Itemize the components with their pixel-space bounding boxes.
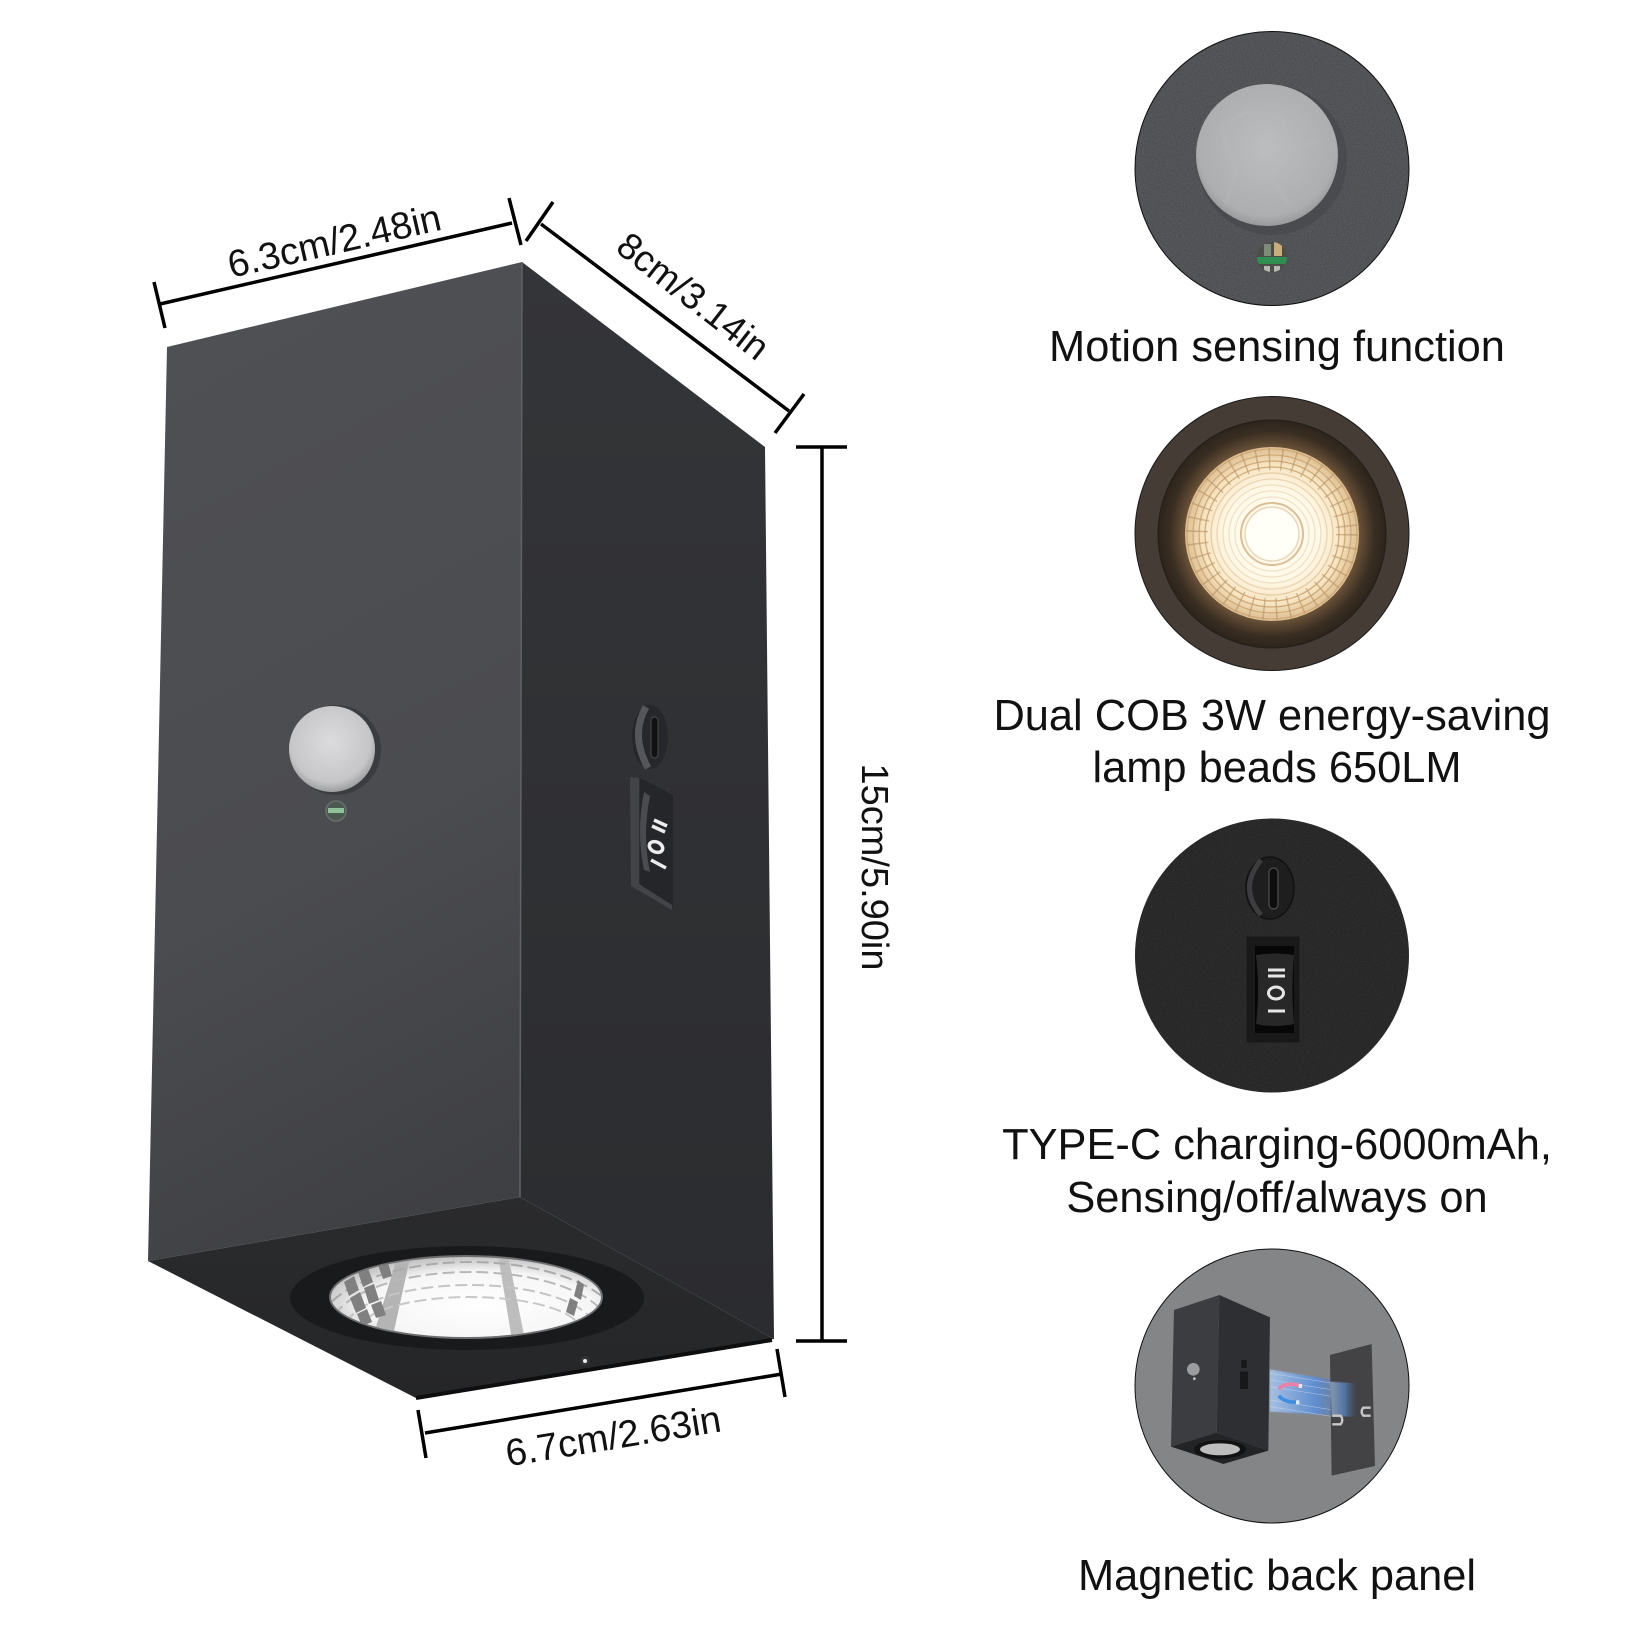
- panel: Type-C charging feature: [1002, 818, 1552, 1222]
- icon: USB-C port on lamp: [632, 705, 668, 769]
- dimension: height: 15cm/5.90in: [853, 763, 895, 971]
- feature label: Magnetic back panel: [1078, 1552, 1476, 1600]
- dimension: depth: 8cm/3.14in: [609, 224, 777, 368]
- panel: COB lamp beads feature: [993, 396, 1551, 792]
- icon: lamp and back panel: [1135, 1249, 1409, 1523]
- lamp side face: [520, 262, 774, 1339]
- icon: sensor close-up: [1135, 32, 1409, 306]
- icon: port and switch close-up: [1135, 818, 1409, 1092]
- feature label: Motion sensing function: [1049, 323, 1505, 371]
- lamp corner highlight: [520, 262, 522, 1197]
- panel: magnetic back panel feature: [1078, 1249, 1476, 1600]
- panel: wall lamp product view: [148, 262, 774, 1398]
- feature label: Dual COB 3W energy-saving: [993, 692, 1551, 740]
- feature label line two: lamp beads 650LM: [1092, 744, 1462, 792]
- icon: downlight on lamp base: [290, 1246, 644, 1366]
- icon: warm light close-up: [1135, 396, 1409, 670]
- feature label line two: Sensing/off/always on: [1066, 1174, 1488, 1222]
- lamp front face: [148, 262, 522, 1261]
- feature label: TYPE-C charging-6000mAh,: [1002, 1121, 1552, 1169]
- dimension: depth: [526, 202, 804, 433]
- panel: motion sensing feature: [1049, 32, 1505, 371]
- dimension: bottom width: 6.7cm/2.63in: [503, 1399, 724, 1475]
- dimension: bottom width: [418, 1349, 785, 1475]
- icon: motion sensor on lamp: [289, 705, 381, 821]
- icon: rocker switch on lamp: [630, 777, 673, 910]
- dimension: top width: [154, 197, 521, 328]
- dimension: top width: 6.3cm/2.48in: [224, 197, 445, 287]
- lamp bottom face: [148, 1197, 774, 1398]
- lamp bottom lip: [416, 1340, 772, 1398]
